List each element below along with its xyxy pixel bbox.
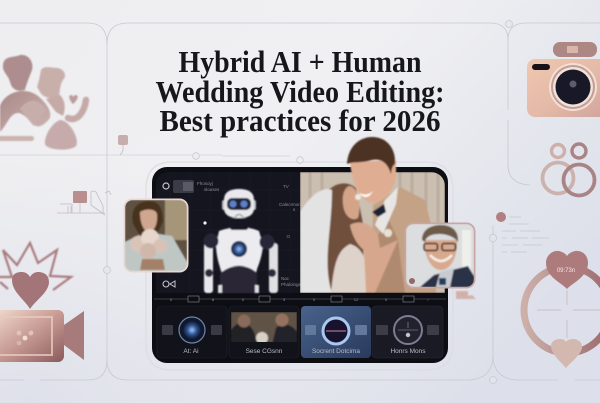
panel: dark workspace: TV <box>283 184 289 189</box>
timeline: / <box>427 297 429 302</box>
timeline: 3 <box>283 297 286 302</box>
card: AI: At: Ai <box>183 348 199 355</box>
card: selected decision: Socrent Dotcima <box>312 348 360 355</box>
panel: tablet editor <box>152 137 448 363</box>
icon: small line scene <box>57 191 111 215</box>
title: Wedding Video Editing: <box>156 74 444 109</box>
title: Best practices for 2026 <box>160 103 440 138</box>
small list note <box>496 212 549 252</box>
panel: dark workspace: Nac <box>281 276 290 281</box>
icon: photo camera <box>527 42 600 117</box>
clock time: 09:73n <box>557 268 575 274</box>
icon: wedding rings <box>542 144 594 196</box>
card: wedding clip: Sese CGsnn <box>246 348 283 355</box>
photo: bride and groom <box>300 172 445 293</box>
robot <box>204 189 278 293</box>
timeline: 0 <box>170 297 173 302</box>
icon: heart clock <box>524 251 600 368</box>
panel: dark workspace: slouses <box>204 187 220 192</box>
panel: dark workspace: Phaloinge <box>281 282 302 287</box>
timeline <box>154 296 446 302</box>
icon: star burst <box>0 243 71 290</box>
panel: dark workspace: Calecrmon <box>279 202 301 207</box>
photo inset: bride with bouquet <box>124 198 188 272</box>
timeline: 0 <box>313 297 316 302</box>
panel: dark workspace <box>156 172 302 293</box>
icon: small pink corner badge <box>456 291 476 299</box>
timeline: 0 <box>385 297 388 302</box>
card: human: Honrs Mons <box>390 348 426 355</box>
panel: dark workspace: s <box>293 207 296 212</box>
timeline: 8 <box>212 297 215 302</box>
icon: video camera <box>0 310 84 362</box>
card: human <box>372 306 443 358</box>
bottom heart <box>551 339 582 368</box>
title <box>156 44 444 138</box>
photo inset: smiling man with glasses <box>404 222 476 288</box>
icon: heart above video camera <box>12 272 49 309</box>
card: AI <box>157 306 227 358</box>
title: Hybrid AI + Human <box>178 44 422 79</box>
panel: dark workspace: Fhosoyj <box>197 181 213 186</box>
panel: dark workspace: :0 <box>286 234 290 239</box>
photo: groom head over frame <box>347 137 396 203</box>
icon: plug <box>118 135 128 155</box>
card: wedding clip <box>229 306 299 358</box>
card: selected decision <box>301 306 371 358</box>
timeline: 0 <box>242 297 245 302</box>
top heart <box>546 251 588 289</box>
icon: couple silhouette <box>0 55 86 150</box>
timeline: 12 <box>354 297 359 302</box>
